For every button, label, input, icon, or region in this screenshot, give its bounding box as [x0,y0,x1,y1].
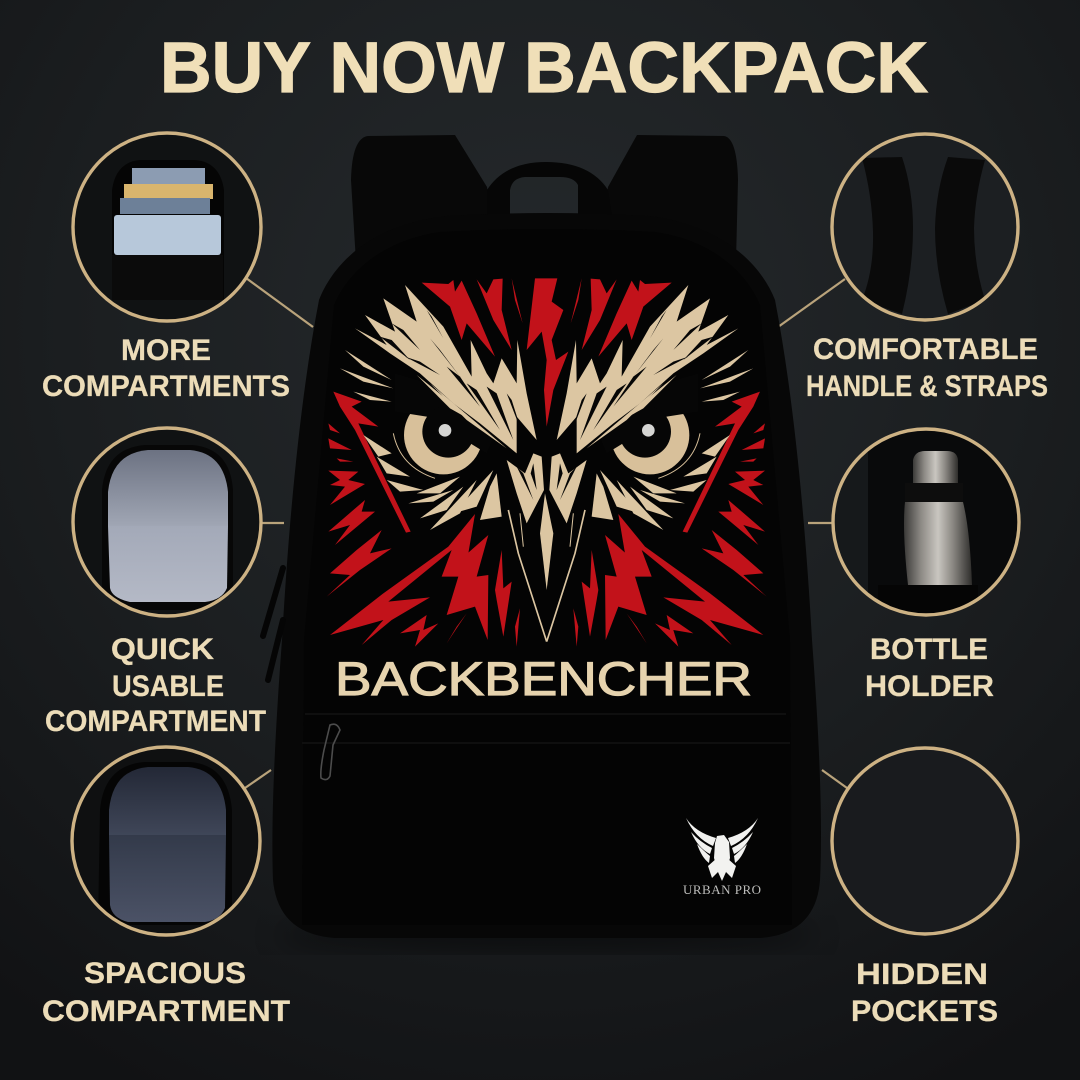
logo text: URBAN PRO [683,882,761,897]
brow dark cuts [380,310,523,440]
label: SPACIOUS [84,957,246,990]
label [865,633,994,703]
circle photo: steel bottle [830,430,1018,620]
label: POCKETS [851,995,998,1028]
center lightning bolt [527,278,568,427]
outer fringe feathers [340,350,507,530]
label [851,958,998,1028]
label: QUICK [111,633,214,666]
label: COMPARTMENTS [42,370,290,403]
label: HIDDEN [856,958,988,991]
beak [540,493,553,590]
ring [833,429,1019,615]
label: USABLE [112,670,224,703]
label: COMPARTMENT [42,995,290,1028]
circle photo: straps [862,157,985,314]
right shoulder strap [600,135,738,262]
ring [832,748,1018,934]
owl left half [327,278,547,647]
pack body [272,213,821,938]
title: BUY NOW BACKPACK [160,29,928,108]
left shoulder strap [351,135,495,262]
zipper pull [321,724,340,780]
front pocket seams [302,714,790,743]
brand name: BACKBENCHER [335,652,752,705]
owl artwork [327,278,767,647]
label [45,633,266,738]
label [806,333,1048,403]
inner face feathers [507,453,544,523]
brow feathers [355,285,537,453]
beak outline [508,510,547,642]
circle photo: dark compartment [73,748,259,934]
label: BOTTLE [870,633,988,666]
callout: hidden pockets [832,748,1018,1028]
owl right half [547,278,767,647]
ring [73,133,261,321]
callout: quick usable compartment [45,428,266,738]
circle photo: grey pocket [74,429,260,615]
circle photo: books in compartment [74,134,260,320]
ring [832,134,1018,320]
red bolts [327,278,523,647]
callout: bottle holder [830,429,1019,703]
front panel [302,229,792,925]
eagle body [714,835,730,881]
ring [72,747,260,935]
ring [73,428,261,616]
label [42,334,290,403]
eye [404,396,483,474]
eagle emblem [686,818,718,878]
label: COMPARTMENT [45,705,266,738]
label: COMFORTABLE [813,333,1038,366]
callout: more compartments [42,133,290,403]
callout: comfortable handle and straps [806,134,1048,403]
pack shadow [277,921,817,949]
label [42,957,290,1028]
urban pro logo [683,818,761,897]
top handle [487,162,612,216]
side zip [263,568,283,680]
callout: spacious compartment [42,747,290,1028]
connector lines [245,278,847,788]
backpack [263,135,821,949]
label: MORE [121,334,211,367]
label: HOLDER [865,670,994,703]
